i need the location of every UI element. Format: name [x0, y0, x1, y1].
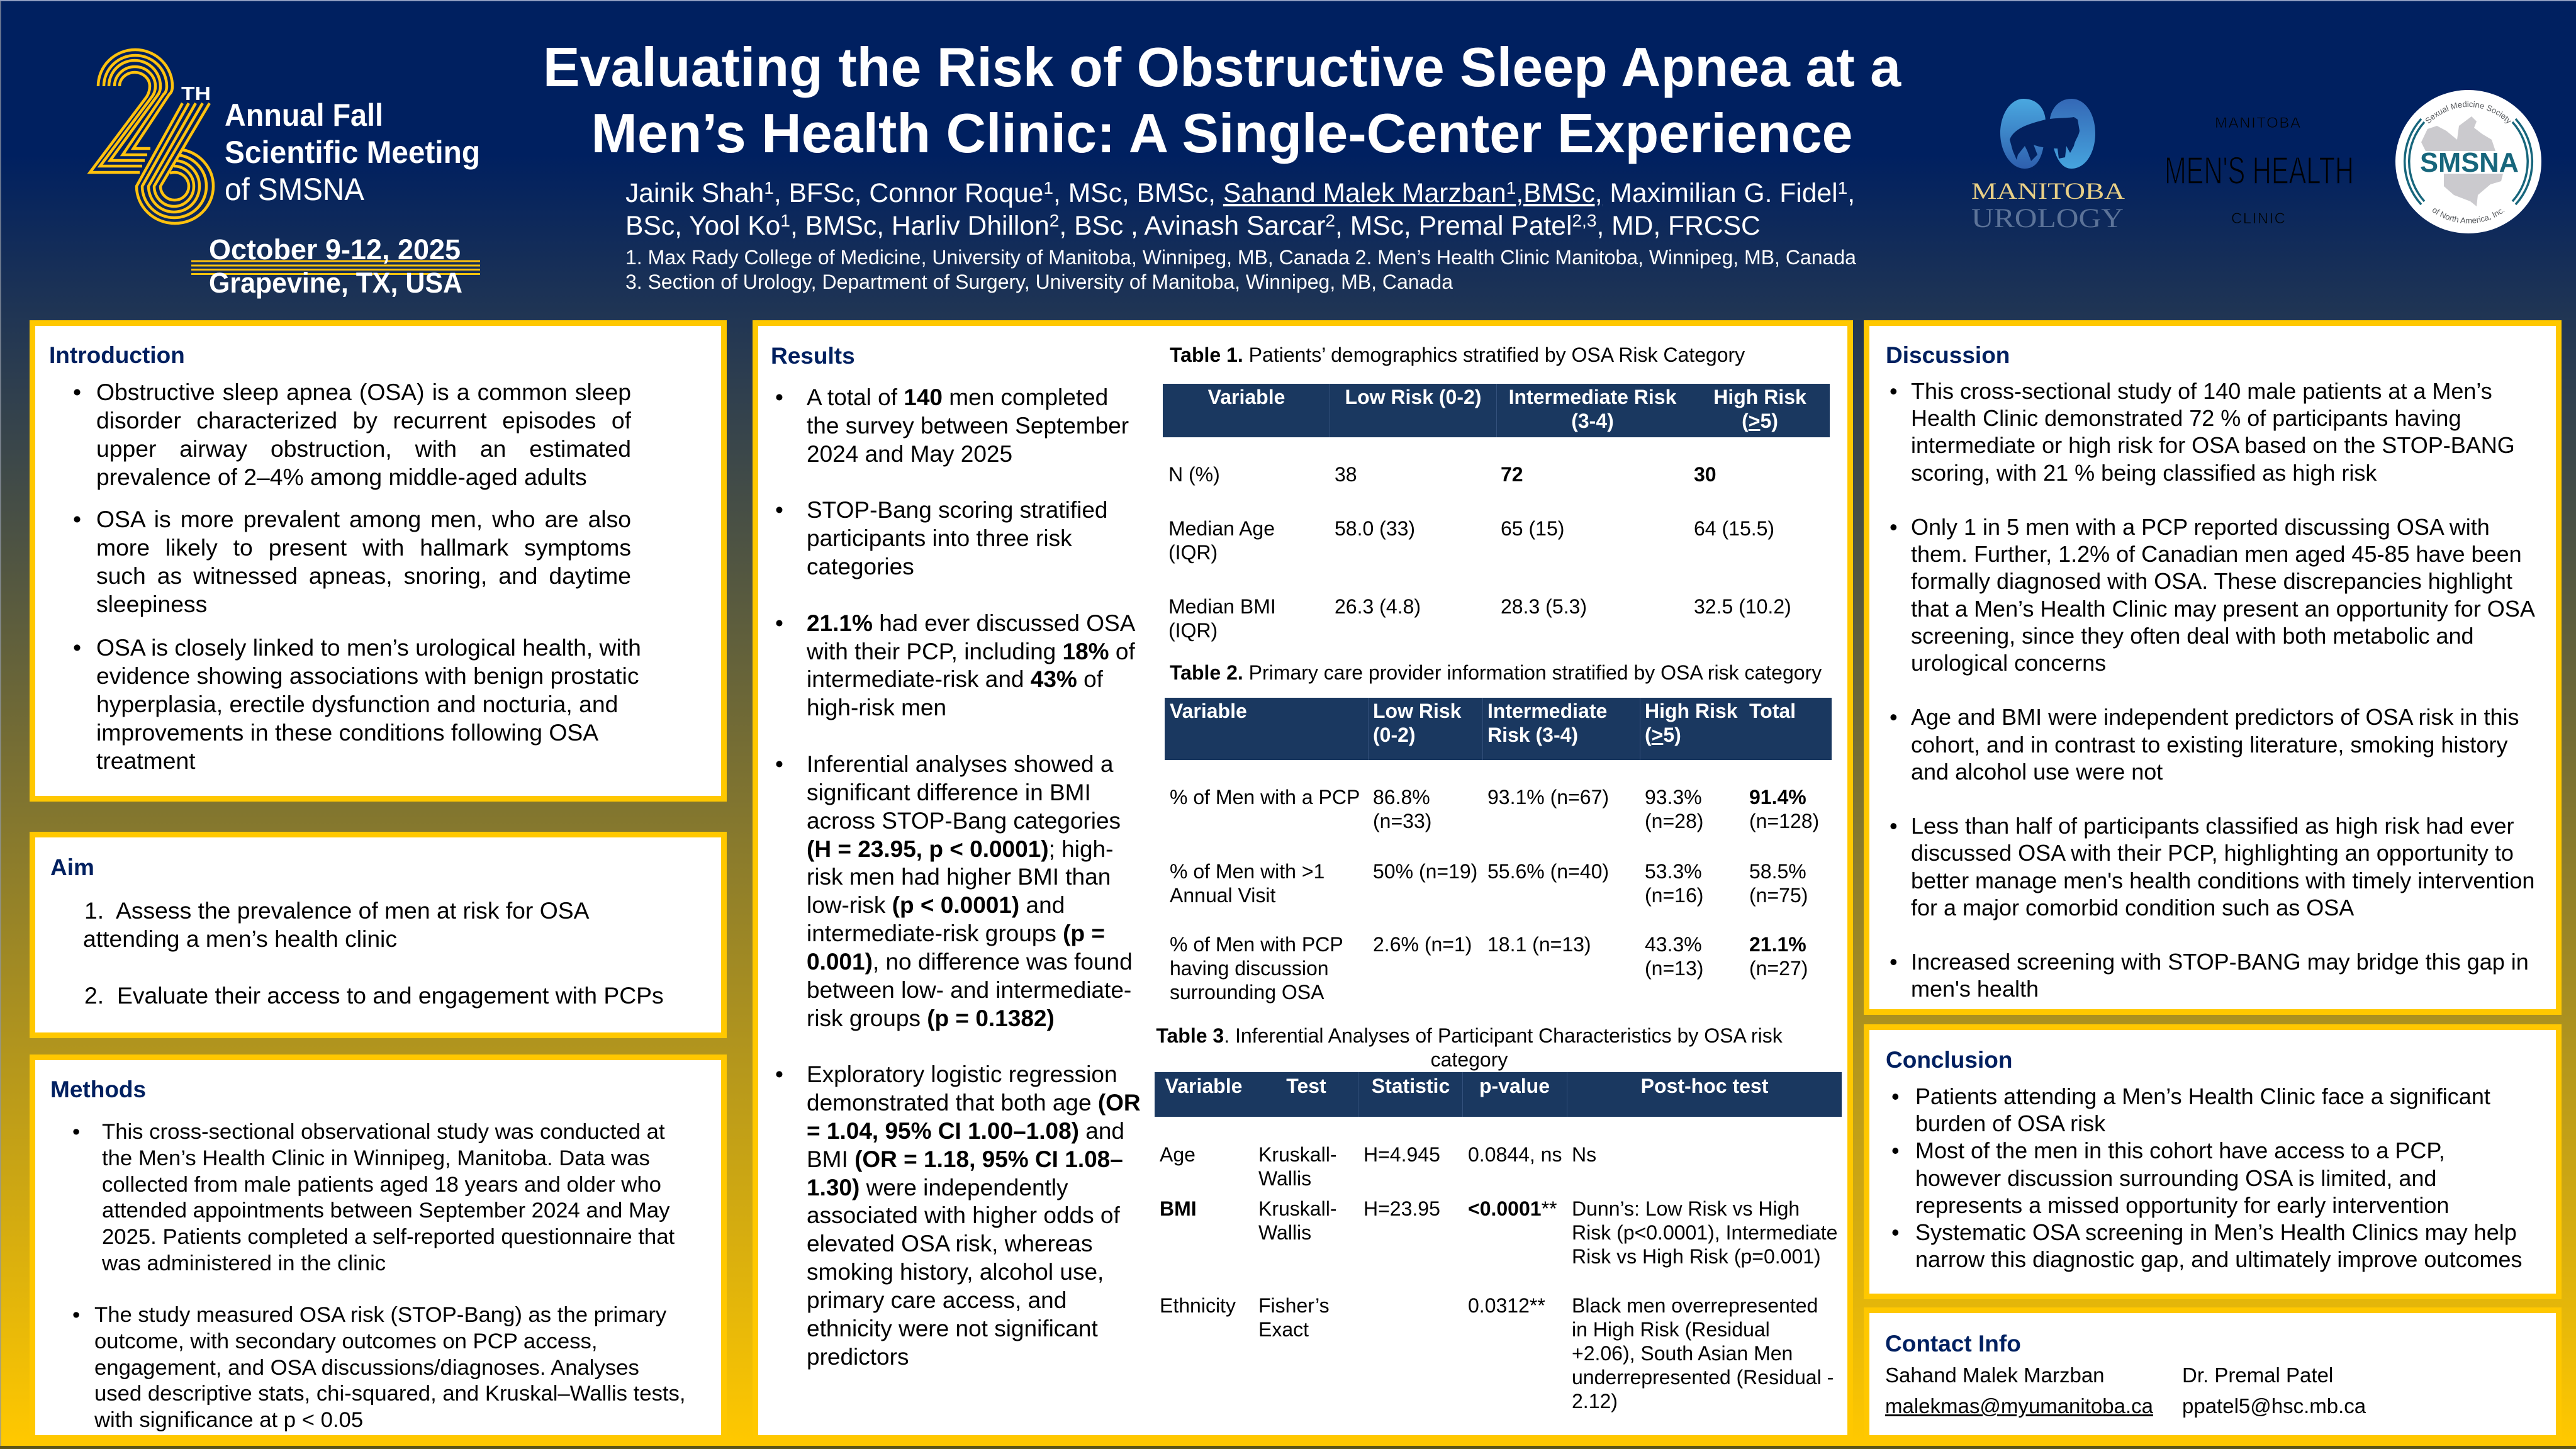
methods bullet 2: engagement, and OSA discussions/diagnoses. Analyses: [94, 1355, 639, 1379]
table 2 rows: 2.6% (n=1): [1373, 933, 1472, 956]
table 2 rows: Annual Visit: [1170, 884, 1275, 907]
authors: Jainik Shah1, BFSc, Connor Roque1, MSc, BMSc, Sahand Malek Marzban1,BMSc, Maximilian G. Fidel1,: [625, 178, 1855, 208]
table 1 rows: 58.0 (33): [1335, 517, 1415, 540]
table 3 rows: Fisher’s: [1258, 1294, 1330, 1317]
methods bullet 2: with significance at p < 0.05: [94, 1408, 363, 1432]
table 1 rows: 32.5 (10.2): [1694, 595, 1791, 618]
discussion bullets: formally diagnosed with OSA. These discrepancies highlight: [1911, 568, 2512, 594]
table 3 rows: 0.0312**: [1468, 1294, 1545, 1317]
heading: introduction: Introduction: [49, 342, 185, 368]
panel: methods: [30, 1055, 727, 1441]
results bullets: intermediate-risk and 43% of: [807, 666, 1103, 692]
table 1 header: High Risk: [1713, 386, 1806, 408]
table 3 rows: H=23.95: [1364, 1197, 1440, 1220]
panel: conclusion: •: [1891, 1219, 1900, 1245]
discussion bullets: screening, since they often deal with both metabolic and: [1911, 623, 2474, 649]
table 3 rows: +2.06), South Asian Men: [1572, 1342, 1793, 1365]
methods bullet 1: This cross-sectional observational study was conducted at: [102, 1120, 665, 1144]
table 2 header: (0-2): [1373, 724, 1416, 746]
intro bullet 2: sleepiness: [96, 591, 207, 617]
results bullets: between low- and intermediate-: [807, 977, 1131, 1003]
intro bullet 3: improvements in these conditions following OSA: [96, 719, 598, 746]
table 1 rows: (IQR): [1168, 541, 1218, 564]
discussion bullets: scoring, with 21 % being classified as high risk: [1911, 460, 2377, 486]
table 3 rows: in High Risk (Residual: [1572, 1318, 1770, 1341]
results bullets: risk groups (p = 0.1382): [807, 1005, 1055, 1031]
label: TH: TH: [181, 82, 211, 104]
contact 1: Sahand Malek Marzban: [1885, 1363, 2105, 1387]
table 2 header: [1165, 698, 1832, 760]
panel: discussion: •: [1890, 704, 1898, 730]
title: [543, 36, 1901, 164]
SMSNA text: SMSNA: [2420, 147, 2519, 178]
discussion bullets: them. Further, 1.2% of Canadian men aged 45-85 have been: [1911, 541, 2522, 567]
methods bullet 1: attended appointments between September 2024 and May: [102, 1199, 670, 1222]
results bullets: 0.001), no difference was found: [807, 949, 1133, 975]
wordmark: UROLOGY: [1971, 204, 2124, 233]
table 3 rows: Exact: [1258, 1318, 1309, 1341]
table 3 caption: [1156, 1024, 1783, 1071]
results bullets: 1.30) were independently: [807, 1175, 1068, 1200]
table 3 rows: underrepresented (Residual -: [1572, 1366, 1834, 1389]
date and location: October 9-12, 2025: [209, 233, 461, 266]
table 2 rows: 93.1% (n=67): [1487, 786, 1609, 808]
intro bullet 3: [73, 634, 641, 774]
results bullets: A total of 140 men completed: [807, 384, 1108, 410]
affiliations: [625, 246, 1856, 293]
table 2 header: Risk (3-4): [1487, 724, 1578, 746]
intro bullet 2: such as witnessed apneas, snoring, and daytime: [96, 562, 631, 589]
discussion bullets: Increased screening with STOP-BANG may bridge this gap in: [1911, 949, 2529, 975]
table 1 caption: Table 1. Patients’ demographics stratified by OSA Risk Category: [1170, 344, 1745, 366]
table 2 rows: 53.3%: [1645, 860, 1702, 883]
logo: Manitoba Urology: [1971, 99, 2125, 233]
panel: discussion: •: [1890, 378, 1898, 404]
methods bullet 2: [72, 1303, 686, 1432]
table 1 header: Intermediate Risk: [1509, 386, 1676, 408]
discussion bullets: Less than half of participants classified as high risk had ever: [1911, 813, 2514, 839]
intro bullet 1: upper airway obstruction, with an estimated: [96, 435, 631, 462]
meeting name: [225, 98, 480, 207]
results bullets: 21.1% had ever discussed OSA: [807, 610, 1135, 636]
logo: Manitoba Men's Health Clinic: MANITOBA: [2215, 115, 2300, 131]
results bullets: the survey between September: [807, 413, 1129, 439]
logo: Manitoba Men's Health Clinic: CLINIC: [2231, 210, 2285, 227]
table 1 rows: 64 (15.5): [1694, 517, 1774, 540]
table 1 rows: 26.3 (4.8): [1335, 595, 1421, 618]
panel: conclusion: •: [1891, 1083, 1900, 1109]
results bullets: STOP-Bang scoring stratified: [807, 497, 1107, 523]
conclusion bullets: Systematic OSA screening in Men’s Health Clinics may help: [1915, 1219, 2517, 1245]
seal arc text: Sexual Medicine Society: [2426, 101, 2512, 123]
logo: Manitoba Men's Health Clinic: [2164, 115, 2354, 227]
table 2 rows: 58.5%: [1749, 860, 1806, 883]
panel: introduction: [30, 320, 727, 802]
results bullets: demonstrated that both age (OR: [807, 1090, 1141, 1116]
methods bullet 1: the Men’s Health Clinic in Winnipeg, Manitoba. Data was: [102, 1146, 650, 1170]
table 2 header: (>5): [1645, 724, 1681, 746]
table 3 rows: H=4.945: [1364, 1143, 1440, 1166]
intro bullet 3: evidence showing associations with benign prostatic: [96, 663, 639, 689]
table 2 rows: 43.3%: [1645, 933, 1702, 956]
discussion bullets: intermediate or high risk for OSA based on the STOP-BANG: [1911, 432, 2515, 458]
panel: methods: •: [72, 1120, 80, 1144]
results bullets: associated with higher odds of: [807, 1202, 1120, 1228]
discussion bullets: urological concerns: [1911, 650, 2106, 676]
table 2 rows: (n=75): [1749, 884, 1808, 907]
panel: conclusion: [1864, 1024, 2562, 1299]
contact 1: malekmas@myumanitoba.ca: [1885, 1394, 2153, 1418]
results bullets: smoking history, alcohol use,: [807, 1259, 1104, 1285]
results bullets: significant difference in BMI: [807, 780, 1091, 805]
icon: stylised 26: [90, 50, 213, 223]
panel: results: •: [775, 497, 783, 523]
table 3 rows: Risk (p<0.0001), Intermediate: [1572, 1221, 1837, 1244]
heading: contact info: Contact Info: [1885, 1331, 2021, 1357]
results bullets: [775, 384, 1141, 1370]
table 1 rows: 30: [1694, 463, 1716, 486]
title: Evaluating the Risk of Obstructive Sleep Apnea at a: [543, 36, 1901, 98]
aim 1: [83, 897, 589, 952]
table 2 rows: % of Men with a PCP: [1170, 786, 1360, 808]
panel: results: •: [775, 610, 783, 636]
table 3 rows: Kruskall-: [1258, 1197, 1336, 1220]
panel: discussion: •: [1890, 813, 1898, 839]
table 2 caption: Table 2. Primary care provider information stratified by OSA risk category: [1170, 661, 1822, 684]
meeting name: Annual Fall: [225, 98, 383, 133]
results bullets: elevated OSA risk, whereas: [807, 1231, 1092, 1256]
table 3 rows: Age: [1160, 1143, 1196, 1166]
results bullets: primary care access, and: [807, 1287, 1067, 1313]
discussion bullets: Health Clinic demonstrated 72 % of participants having: [1911, 405, 2461, 431]
heading: results: Results: [771, 343, 855, 369]
table 3 header: Post-hoc test: [1641, 1075, 1768, 1097]
methods bullet 2: The study measured OSA risk (STOP-Bang) as the primary: [94, 1303, 666, 1327]
table 3 rows: 0.0844, ns: [1468, 1143, 1562, 1166]
conclusion bullets: burden of OSA risk: [1915, 1111, 2105, 1136]
discussion bullets: [1890, 378, 2535, 1002]
title: Men’s Health Clinic: A Single-Center Experience: [591, 102, 1852, 164]
date and location: Grapevine, TX, USA: [209, 267, 462, 299]
table 2 rows: (n=33): [1373, 810, 1431, 832]
date and location: [209, 233, 462, 299]
intro bullet 1: [73, 379, 632, 490]
table 1 rows: 65 (15): [1501, 517, 1564, 540]
table 3 rows: Black men overrepresented: [1572, 1294, 1818, 1317]
results bullets: intermediate-risk groups (p =: [807, 920, 1105, 946]
affiliations: 3. Section of Urology, Department of Surgery, University of Manitoba, Winnipeg, MB, Canada: [625, 271, 1453, 293]
table 3 rows: Risk vs High Risk (p=0.001): [1572, 1245, 1821, 1268]
panel: results: •: [775, 384, 783, 410]
results bullets: across STOP-Bang categories: [807, 808, 1121, 834]
panel: results: •: [775, 1061, 783, 1087]
logo: 26th annual fall scientific meeting: [90, 50, 480, 299]
conclusion bullets: Patients attending a Men’s Health Clinic face a significant: [1915, 1083, 2490, 1109]
panel: introduction: •: [73, 634, 81, 661]
table 3 header: Test: [1286, 1075, 1326, 1097]
discussion bullets: better manage men's health conditions with timely intervention: [1911, 868, 2534, 893]
results bullets: ethnicity were not significant: [807, 1316, 1098, 1341]
results bullets: risk men had higher BMI than: [807, 864, 1111, 890]
results bullets: = 1.04, 95% CI 1.00–1.08) and: [807, 1118, 1124, 1144]
table 1 rows: Median BMI: [1168, 595, 1276, 618]
contact 1: [1885, 1363, 2153, 1418]
results bullets: high-risk men: [807, 695, 946, 720]
methods bullet 1: [72, 1120, 675, 1275]
conclusion bullets: Most of the men in this cohort have access to a PCP,: [1915, 1138, 2445, 1163]
meeting name: of SMSNA: [225, 172, 365, 207]
methods bullet 1: 2025. Patients completed a self-reported questionnaire that: [102, 1225, 675, 1249]
discussion bullets: for a major comorbid condition such as OSA: [1911, 895, 2354, 920]
table 3 rows: Wallis: [1258, 1167, 1311, 1190]
panel: discussion: [1864, 320, 2562, 1015]
results bullets: low-risk (p < 0.0001) and: [807, 892, 1065, 918]
table 2 header: Intermediate: [1487, 700, 1607, 722]
methods bullet 2: outcome, with secondary outcomes on PCP access,: [94, 1329, 598, 1353]
discussion bullets: This cross-sectional study of 140 male patients at a Men’s: [1911, 378, 2492, 404]
panel: introduction: •: [73, 506, 81, 532]
results bullets: categories: [807, 554, 914, 579]
wordmark: MANITOBA: [1971, 179, 2125, 204]
panel: contact info: [1864, 1307, 2562, 1441]
discussion bullets: Age and BMI were independent predictors of OSA risk in this: [1911, 704, 2519, 730]
discussion bullets: Only 1 in 5 men with a PCP reported discussing OSA with: [1911, 514, 2490, 540]
heading: methods: Methods: [50, 1077, 146, 1102]
table 3 rows: Ethnicity: [1160, 1294, 1236, 1317]
panel: conclusion: •: [1891, 1138, 1900, 1163]
table 2 rows: (n=128): [1749, 810, 1819, 832]
methods bullet 2: used descriptive stats, chi-squared, and Kruskal–Wallis tests,: [94, 1382, 686, 1406]
table 2 rows: (n=28): [1645, 810, 1703, 832]
table 2 rows: (n=13): [1645, 957, 1703, 980]
conclusion bullets: however discussion surrounding OSA is limited, and: [1915, 1165, 2436, 1191]
table 1 rows: Median Age: [1168, 517, 1275, 540]
table 1 header: (3-4): [1571, 410, 1614, 432]
table 2 rows: 50% (n=19): [1373, 860, 1477, 883]
heading: discussion: Discussion: [1886, 342, 2010, 368]
affiliations: 1. Max Rady College of Medicine, University of Manitoba, Winnipeg, MB, Canada 2. Men’s Health Clinic Manitoba, Winnipeg, MB, Canada: [625, 246, 1856, 269]
results bullets: (H = 23.95, p < 0.0001); high-: [807, 836, 1113, 862]
table 1 header: Low Risk (0-2): [1345, 386, 1481, 408]
table 2 header: Total: [1749, 700, 1796, 722]
aim 2: 2.: [84, 982, 104, 1009]
table 2 rows: 18.1 (n=13): [1487, 933, 1591, 956]
intro bullet 2: [73, 506, 631, 617]
logo: Manitoba Men's Health Clinic: MEN'S HEALTH: [2164, 149, 2354, 192]
results bullets: participants into three risk: [807, 525, 1072, 551]
table 3 rows: 2.12): [1572, 1390, 1618, 1413]
table 1 rows: [1168, 463, 1791, 642]
panel: methods: •: [72, 1303, 80, 1327]
table 2 rows: 21.1%: [1749, 933, 1806, 956]
intro bullet 1: disorder characterized by recurrent episodes of: [96, 407, 631, 434]
table 2 header: High Risk: [1645, 700, 1738, 722]
results bullets: BMI (OR = 1.18, 95% CI 1.08–: [807, 1146, 1123, 1172]
table 2 rows: (n=27): [1749, 957, 1808, 980]
header logos: [87, 48, 2541, 299]
contact 2: Dr. Premal Patel: [2182, 1363, 2333, 1387]
heading: conclusion: Conclusion: [1886, 1047, 2012, 1073]
table 2 rows: having discussion: [1170, 957, 1329, 980]
authors: BSc, Yool Ko1, BMSc, Harliv Dhillon2, BSc , Avinash Sarcar2, MSc, Premal Patel2,3, MD, FRCSC: [625, 211, 1761, 241]
discussion bullets: discussed OSA with their PCP, highlighting an opportunity to: [1911, 840, 2514, 866]
results bullets: 2024 and May 2025: [807, 441, 1012, 467]
logo: SMSNA seal: [2395, 90, 2541, 233]
table 3 rows: <0.0001**: [1468, 1197, 1557, 1220]
conclusion bullets: narrow this diagnostic gap, and ultimately improve outcomes: [1915, 1246, 2522, 1272]
table 1 rows: (IQR): [1168, 619, 1218, 642]
aim 2: [84, 982, 664, 1009]
stripes behind date: [191, 260, 480, 275]
table 1 rows: 38: [1335, 463, 1357, 486]
conclusion bullets: [1891, 1083, 2522, 1272]
discussion bullets: and alcohol use were not: [1911, 759, 2163, 785]
table 1 rows: 72: [1501, 463, 1523, 486]
intro bullet 3: hyperplasia, erectile dysfunction and nocturia, and: [96, 691, 618, 717]
table 2 rows: surrounding OSA: [1170, 981, 1324, 1004]
discussion bullets: that a Men’s Health Clinic may present an opportunity for OSA: [1911, 596, 2535, 622]
table 3 header: p-value: [1479, 1075, 1550, 1097]
table 1 header: [1163, 384, 1830, 437]
table 1 rows: 28.3 (5.3): [1501, 595, 1587, 618]
table 3 rows: BMI: [1160, 1197, 1197, 1220]
intro bullet 2: OSA is more prevalent among men, who are also: [96, 506, 631, 532]
table 3 header: [1155, 1072, 1842, 1117]
table 2 rows: (n=16): [1645, 884, 1703, 907]
table 2 rows: % of Men with >1: [1170, 860, 1324, 883]
results bullets: Exploratory logistic regression: [807, 1061, 1117, 1087]
table 3: inferential analyses: [1155, 1024, 1842, 1413]
table 1 rows: N (%): [1168, 463, 1220, 486]
intro bullet 1: prevalence of 2–4% among middle-aged adults: [96, 464, 587, 490]
seal arc text: [2426, 101, 2512, 223]
panel: results: •: [775, 751, 783, 777]
table 3 caption: category: [1431, 1048, 1508, 1071]
table 3 header: Statistic: [1372, 1075, 1450, 1097]
panel: discussion: •: [1890, 514, 1898, 540]
table 2: primary care provider: [1165, 661, 1832, 1004]
heading: aim: Aim: [50, 854, 94, 880]
intro bullet 3: OSA is closely linked to men’s urological health, with: [96, 634, 641, 661]
conclusion bullets: represents a missed opportunity for early intervention: [1915, 1192, 2449, 1218]
meeting name: Scientific Meeting: [225, 135, 480, 170]
table 2 header: Low Risk: [1373, 700, 1461, 722]
table 3 caption: Table 3. Inferential Analyses of Participant Characteristics by OSA risk: [1156, 1024, 1783, 1047]
discussion bullets: cohort, and in contrast to existing literature, smoking history: [1911, 732, 2507, 758]
intro bullet 1: Obstructive sleep apnea (OSA) is a common sleep: [96, 379, 631, 405]
table 3 header: Variable: [1165, 1075, 1242, 1097]
seal arc text: of North America, Inc.: [2433, 208, 2504, 223]
aim 1: Assess the prevalence of men at risk for OSA: [116, 897, 589, 924]
results bullets: with their PCP, including 18% of: [807, 639, 1135, 664]
methods bullet 1: collected from male patients aged 18 years and older who: [102, 1173, 661, 1197]
panel: discussion: •: [1890, 949, 1898, 975]
table 1 header: Variable: [1208, 386, 1285, 408]
panel: introduction: •: [73, 379, 81, 405]
panel: aim: [30, 832, 727, 1038]
results bullets: predictors: [807, 1344, 909, 1370]
table 2 rows: [1170, 786, 1819, 1004]
table 2 rows: 91.4%: [1749, 786, 1806, 808]
map: [2421, 116, 2503, 206]
contact 2: [2182, 1363, 2366, 1418]
panel: aim: Evaluate their access to and engagement with PCPs: [117, 982, 664, 1009]
table 3 rows: Wallis: [1258, 1221, 1311, 1244]
results bullets: Inferential analyses showed a: [807, 751, 1113, 777]
aim 1: attending a men’s health clinic: [83, 926, 397, 952]
panel: results: [753, 320, 1853, 1441]
table 2 header: Variable: [1170, 700, 1247, 722]
table 3 rows: [1160, 1143, 1837, 1413]
intro bullet 3: treatment: [96, 747, 196, 774]
table 2 rows: 55.6% (n=40): [1487, 860, 1609, 883]
wordmark: [1971, 179, 2125, 233]
rings: [2405, 119, 2532, 204]
table 1 header: (>5): [1742, 410, 1778, 432]
table 3 rows: Ns: [1572, 1143, 1596, 1166]
table 2 rows: 93.3%: [1645, 786, 1702, 808]
discussion bullets: men's health: [1911, 976, 2039, 1002]
table 1: demographics: [1163, 344, 1830, 642]
authors: [625, 178, 1855, 241]
table 2 rows: 86.8%: [1373, 786, 1430, 808]
methods bullet 1: was administered in the clinic: [102, 1251, 386, 1275]
icon: kidneys and bison: [2000, 99, 2095, 169]
table 2 rows: % of Men with PCP: [1170, 933, 1343, 956]
table 3 rows: Dunn’s: Low Risk vs High: [1572, 1197, 1800, 1220]
aim 1: 1.: [84, 897, 104, 924]
intro bullet 2: more likely to present with hallmark symptoms: [96, 534, 631, 561]
contact 2: ppatel5@hsc.mb.ca: [2182, 1394, 2366, 1418]
table 3 rows: Kruskall-: [1258, 1143, 1336, 1166]
